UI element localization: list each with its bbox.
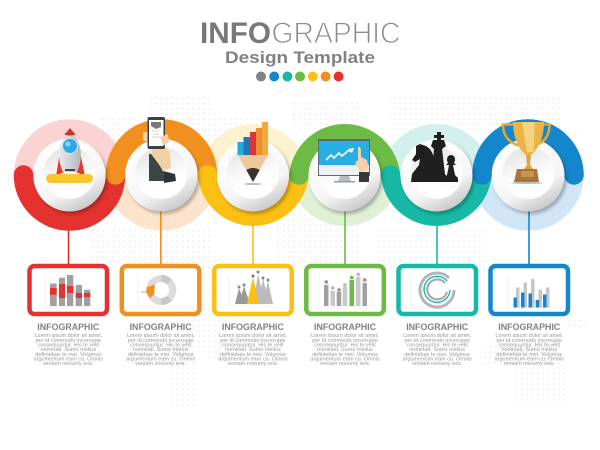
body text	[495, 333, 564, 367]
body text: Lorem ipsum dolor sit amet,	[311, 333, 379, 339]
colour dots	[256, 72, 344, 82]
icon: hand holding phone	[143, 117, 176, 183]
label: INFOGRAPHIC	[498, 322, 560, 333]
body text: argumentum eam cu. Omnis	[34, 356, 103, 362]
body text: per id commodo incorrupte	[128, 338, 193, 344]
label: INFOGRAPHIC	[314, 322, 376, 333]
body text	[310, 333, 380, 367]
label: INFOGRAPHIC	[37, 322, 99, 333]
box with paired bar chart	[490, 266, 568, 314]
step 5 disc and chess pieces	[400, 132, 474, 214]
body text: definiebas te mei. Volumus	[128, 352, 194, 358]
box with lollipop bar chart	[306, 266, 384, 314]
body text: argumentum eam cu. Omnis	[218, 356, 288, 362]
box with stacked bar chart	[30, 266, 107, 314]
title	[200, 17, 400, 50]
body text	[218, 333, 288, 367]
panel: step 6 chart and text	[490, 266, 568, 367]
body text: nominati. Sumo melius	[317, 347, 373, 353]
body text: Lorem ipsum dolor sit amet,	[127, 333, 195, 339]
step 3 disc and pencil chart	[217, 122, 291, 214]
snake ribbon	[24, 129, 574, 221]
body text: definiebas te mei. Volumus	[496, 352, 562, 358]
body text: nominati. Sumo melius	[225, 347, 281, 353]
body text	[403, 333, 472, 367]
subtitle: Design Template	[225, 49, 375, 67]
body text: definiebas te mei. Volumus	[404, 352, 470, 358]
panel: step 4 chart and text	[306, 266, 384, 367]
body text: veniam nonumy eos.	[228, 361, 279, 367]
panel: step 2 chart and text	[122, 266, 199, 367]
icon: trophy	[503, 122, 550, 184]
body text: per id commodo incorrupte	[220, 338, 286, 344]
body text: veniam nonumy eos.	[412, 361, 463, 367]
box with peak chart	[214, 266, 292, 314]
body text	[126, 333, 196, 367]
body text: Lorem ipsum dolor sit amet,	[219, 333, 287, 339]
body text: consequuntur. His te velit	[222, 342, 284, 348]
body text: nominati. Sumo melius	[133, 347, 189, 353]
connector stems	[68, 211, 529, 265]
body text: argumentum eam cu. Omnis	[403, 356, 472, 362]
body text: per id commodo incorrupte	[312, 338, 378, 344]
body text: nominati. Sumo melius	[40, 347, 96, 353]
step 6 disc and trophy	[492, 122, 566, 214]
icon: monitor with hand	[318, 139, 370, 182]
pale half rings	[24, 129, 574, 221]
label: INFOGRAPHIC	[406, 322, 468, 333]
title: GRAPHIC	[272, 17, 400, 50]
body text: veniam nonumy eos.	[135, 361, 186, 367]
body text: Lorem ipsum dolor sit amet,	[403, 333, 472, 339]
body text: definiebas te mei. Volumus	[220, 352, 286, 358]
panel: step 5 chart and text	[398, 266, 476, 367]
body text: argumentum eam cu. Omnis	[495, 356, 564, 362]
body text: Lorem ipsum dolor sit amet,	[34, 333, 103, 339]
label: INFOGRAPHIC	[130, 322, 192, 333]
body text: consequuntur. His te velit	[38, 342, 99, 348]
box with donut chart	[122, 266, 199, 314]
body text: argumentum eam cu. Omnis	[126, 356, 196, 362]
body text: veniam nonumy eos.	[504, 361, 555, 367]
icon: chess pieces	[411, 132, 458, 182]
icon: pencil with bars	[238, 122, 268, 185]
step 2 disc and phone in hand	[126, 117, 200, 214]
body text: nominati. Sumo melius	[409, 347, 465, 353]
background dotted world map	[22, 97, 585, 406]
body text: per id commodo incorrupte	[497, 338, 562, 344]
title: INFO	[200, 17, 271, 50]
step 1 disc and rocket	[34, 128, 108, 214]
step 4 disc and monitor	[308, 139, 382, 214]
body text: consequuntur. His te velit	[314, 342, 376, 348]
panel: step 3 chart and text	[214, 266, 292, 367]
body text: consequuntur. His te velit	[130, 342, 192, 348]
body text: per id commodo incorrupte	[404, 338, 470, 344]
body text: Lorem ipsum dolor sit amet,	[495, 333, 564, 339]
panel: step 1 chart and text	[30, 266, 107, 367]
body text: consequuntur. His te velit	[406, 342, 468, 348]
body text: consequuntur. His te velit	[499, 342, 560, 348]
label: INFOGRAPHIC	[222, 322, 284, 333]
box with radial arc chart	[398, 266, 476, 314]
body text: definiebas te mei. Volumus	[312, 352, 378, 358]
body text: veniam nonumy eos.	[320, 361, 371, 367]
icon: rocket	[46, 128, 93, 183]
body text	[34, 333, 103, 367]
body text: argumentum eam cu. Omnis	[310, 356, 380, 362]
body text: nominati. Sumo melius	[501, 347, 557, 353]
body text: per id commodo incorrupte	[36, 338, 101, 344]
body text: definiebas te mei. Volumus	[35, 352, 101, 358]
body text: veniam nonumy eos.	[43, 361, 94, 367]
